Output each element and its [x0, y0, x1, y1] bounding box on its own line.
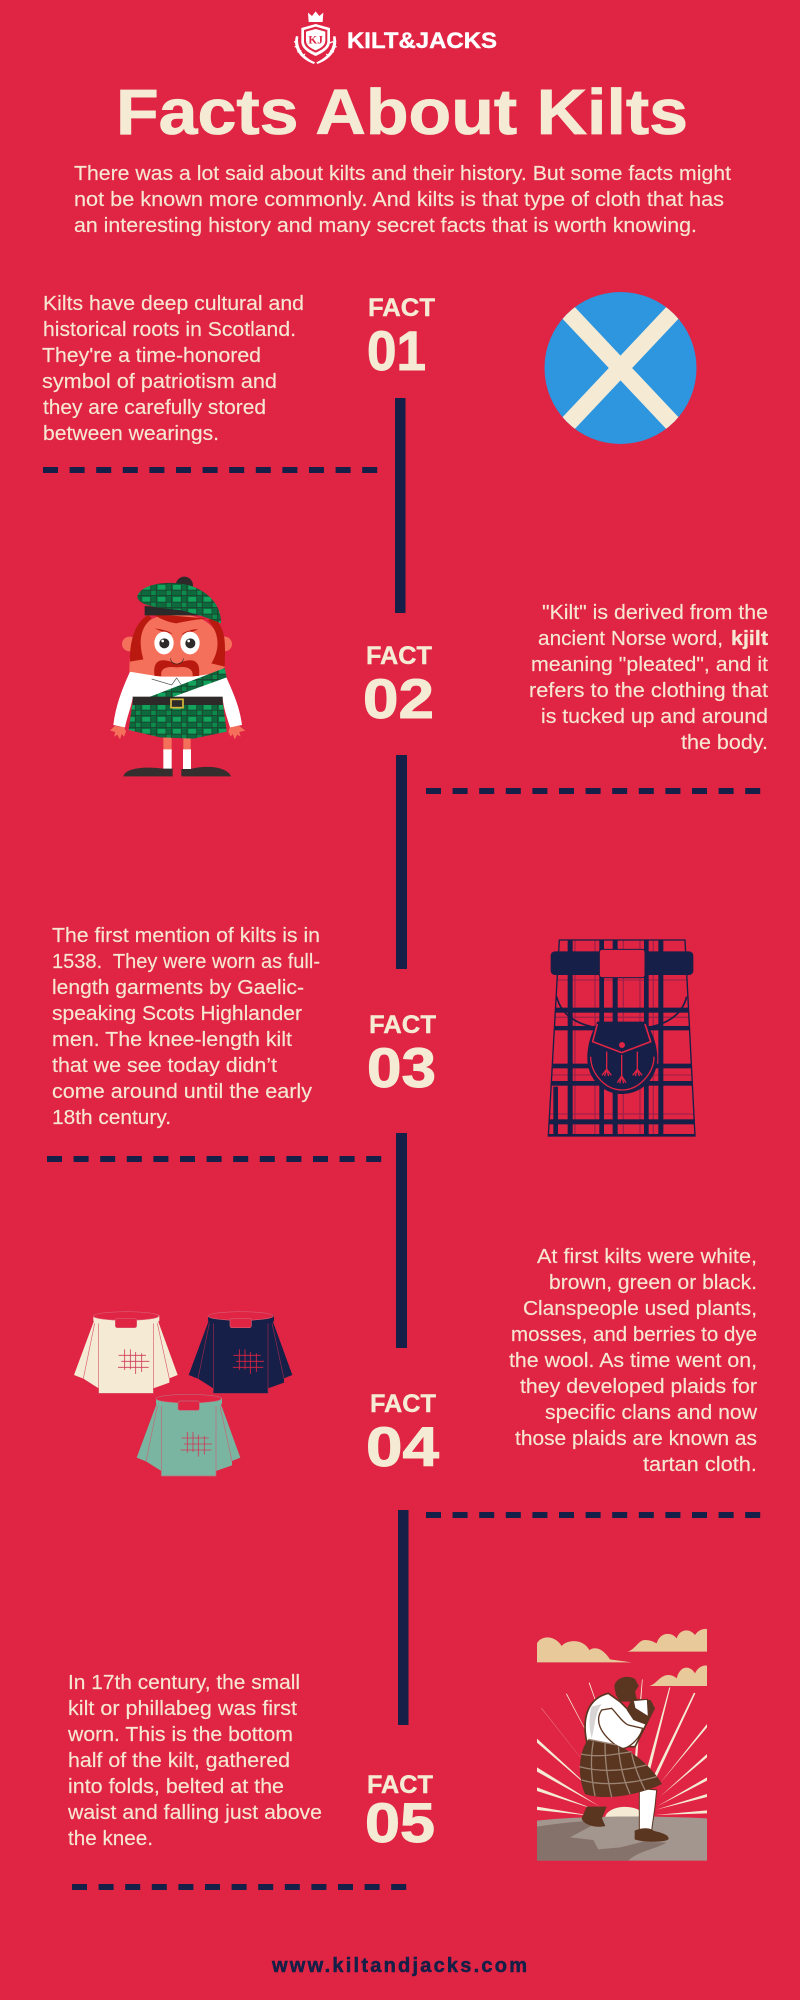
- belt: [551, 951, 693, 975]
- panel: fact 4 text: they developed plaids for: [520, 1376, 757, 1398]
- intro text: [74, 163, 731, 237]
- kilt: [580, 1739, 662, 1797]
- eyebrows: [155, 628, 198, 635]
- heading: fact 02: [363, 642, 434, 730]
- footer URL: www.kiltandjacks.com: [271, 1955, 527, 1977]
- head: [129, 614, 225, 677]
- heading: fact 02: 02: [363, 667, 434, 730]
- intro text: not be known more commonly. And kilts is that type of cloth that has: [74, 189, 724, 211]
- panel: fact 1 text: symbol of patriotism and: [42, 371, 277, 393]
- panel: fact 3 text: 1538. They were worn as full-: [52, 951, 320, 973]
- heading: fact 01: FACT: [368, 294, 435, 322]
- connector 3: [47, 1133, 407, 1348]
- panel: fact 1 text: [42, 293, 304, 445]
- panel: fact 1 text: Kilts have deep cultural and: [43, 293, 304, 315]
- panel: fact 5 text: kilt or phillabeg was first: [68, 1698, 297, 1720]
- panel: fact 4 text: [509, 1246, 758, 1476]
- collar: [152, 678, 195, 685]
- icon: tartan kilt with sporran: [548, 940, 695, 1137]
- sporran: [587, 1022, 657, 1094]
- hair: [130, 615, 225, 667]
- panel: fact 2 text: refers to the clothing that: [529, 680, 768, 702]
- shirt: [113, 672, 242, 727]
- hands: [110, 726, 126, 739]
- connector 1: [43, 398, 406, 613]
- ground: [537, 1816, 707, 1861]
- straps: [557, 997, 687, 1027]
- legs: [163, 737, 191, 752]
- panel: fact 3 text: 18th century.: [52, 1107, 171, 1129]
- cream kilt: [74, 1312, 178, 1393]
- hand and mug: [627, 1698, 655, 1725]
- brand name: KILT&JACKS: [347, 28, 497, 53]
- panel: fact 5 text: waist and falling just above: [67, 1802, 322, 1824]
- sash: [148, 668, 227, 697]
- panel: fact 5 text: half of the kilt, gathered: [68, 1750, 290, 1772]
- heading: fact 01: [367, 294, 435, 382]
- icon: crest: KJ: [308, 34, 323, 46]
- panel: fact 2 text: meaning "pleated", and it: [531, 654, 768, 676]
- heading: fact 05: 05: [365, 1791, 435, 1854]
- heading: fact 04: [366, 1390, 439, 1478]
- panel: fact 3 text: The first mention of kilts is in: [52, 925, 320, 947]
- panel: fact 4 text: Clanspeople used plants,: [523, 1298, 757, 1320]
- sun: [605, 1807, 645, 1817]
- navy kilt: [189, 1312, 292, 1393]
- panel: fact 4 text: mosses, and berries to dye: [511, 1324, 757, 1346]
- panel: fact 5 text: worn. This is the bottom: [67, 1724, 293, 1746]
- ears: [122, 637, 137, 651]
- panel: fact 1 text: they are carefully stored: [43, 397, 266, 419]
- panel: fact 2 text: the body.: [681, 732, 768, 754]
- title: Facts About Kilts: [116, 76, 688, 148]
- intro text: There was a lot said about kilts and their history. But some facts might: [74, 163, 731, 185]
- panel: fact 5 text: In 17th century, the small: [68, 1672, 300, 1694]
- man: [582, 1807, 607, 1827]
- panel: fact 3 text: speaking Scots Highlander: [52, 1003, 302, 1025]
- kilt plaid: [548, 940, 695, 1137]
- sleeve shade: [590, 1704, 602, 1738]
- panel: fact 3 text: [52, 925, 320, 1129]
- panel: fact 2 text: [529, 602, 768, 754]
- kilt: [129, 702, 227, 739]
- heading: fact 03: [367, 1011, 436, 1099]
- logo: [294, 11, 497, 64]
- panel: fact 2 text: kjilt: [731, 628, 768, 650]
- heading: fact 04: 04: [366, 1415, 439, 1478]
- panel: fact 3 text: length garments by Gaelic-: [52, 977, 304, 999]
- panel: fact 2 text: is tucked up and around: [541, 706, 768, 728]
- panel: fact 4 text: the wool. As time went on,: [509, 1350, 757, 1372]
- heading: fact 03: FACT: [369, 1011, 436, 1039]
- clouds: [537, 1629, 707, 1686]
- torso and arm: [585, 1693, 647, 1747]
- shoes: [123, 768, 173, 776]
- panel: fact 1 text: historical roots in Scotland.: [43, 319, 296, 341]
- panel: fact 4 text: brown, green or black.: [549, 1272, 757, 1294]
- icon: crest: [294, 11, 337, 64]
- panel: fact 4 text: tartan cloth.: [643, 1454, 757, 1476]
- eyes: [154, 632, 174, 654]
- belt: [133, 697, 223, 705]
- green kilt: [137, 1394, 240, 1476]
- panel: fact 4 text: those plaids are known as: [515, 1428, 757, 1450]
- panel: fact 3 text: that we see today didn’t: [52, 1055, 277, 1077]
- heading: fact 01: 01: [367, 319, 426, 382]
- mustache: [154, 660, 199, 676]
- connector 2: [396, 755, 760, 969]
- connector 4: [398, 1510, 760, 1725]
- heading: fact 04: FACT: [370, 1390, 436, 1418]
- icon: character in kilt: [110, 577, 245, 776]
- panel: fact 5 text: [67, 1672, 322, 1850]
- panel: fact 1 text: between wearings.: [43, 423, 219, 445]
- panel: fact 5 text: into folds, belted at the: [68, 1776, 284, 1798]
- icon: Scottish flag: [544, 292, 696, 444]
- beret band: [145, 606, 204, 615]
- panel: fact 2 text: ancient Norse word,: [538, 628, 723, 650]
- panel: fact 2 text: "Kilt" is derived from the: [542, 602, 768, 624]
- panel: fact 3 text: come around until the early: [52, 1081, 312, 1103]
- sun rays: [537, 1679, 707, 1816]
- heading: fact 05: [365, 1771, 435, 1854]
- panel: fact 4 text: At first kilts were white,: [537, 1246, 757, 1268]
- icon: three coloured kilts: [74, 1312, 292, 1476]
- panel: fact 4 text: specific clans and now: [545, 1402, 758, 1424]
- pompon: [176, 577, 193, 594]
- panel: fact 3 text: men. The knee-length kilt: [52, 1029, 292, 1051]
- intro text: an interesting history and many secret facts that is worth knowing.: [74, 215, 697, 237]
- panel: fact 1 text: They're a time-honored: [42, 345, 261, 367]
- heading: fact 02: FACT: [366, 642, 432, 670]
- connector 5: [72, 1884, 406, 1890]
- heading: fact 05: FACT: [367, 1771, 433, 1799]
- panel: fact 5 text: the knee.: [68, 1828, 153, 1850]
- icon: highlander drinking: [537, 1629, 707, 1861]
- heading: fact 03: 03: [367, 1036, 436, 1099]
- beret: [137, 583, 221, 623]
- head: [614, 1677, 639, 1702]
